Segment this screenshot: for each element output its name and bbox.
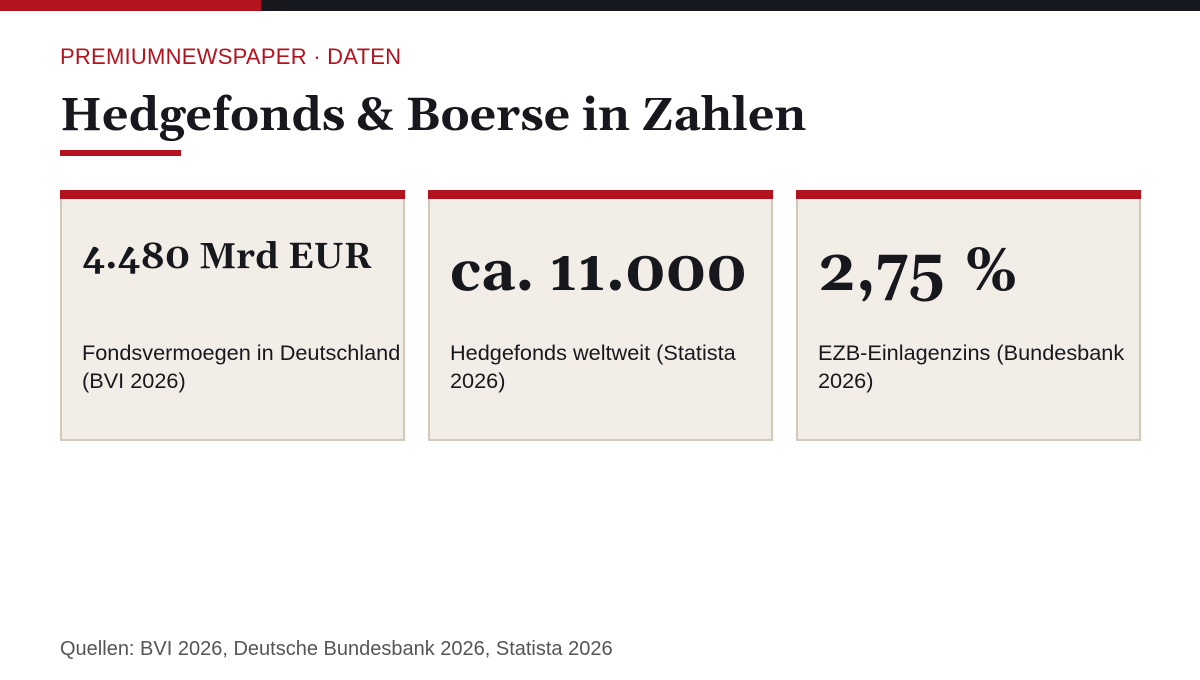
card accent bar xyxy=(796,190,1141,199)
stat value: 4.480 Mrd EUR xyxy=(82,236,373,281)
card accent bar xyxy=(428,190,773,199)
panel: fund assets xyxy=(60,190,405,441)
stat label: 2026) xyxy=(818,368,873,393)
panel: ECB rate xyxy=(796,190,1141,441)
sources: Quellen: BVI 2026, Deutsche Bundesbank 2026, Statista 2026 xyxy=(60,638,613,660)
stat label: 2026) xyxy=(450,368,505,393)
title underline xyxy=(60,150,181,156)
stat value: 2,75 % xyxy=(818,234,1017,311)
stat label: Fondsvermoegen in Deutschland xyxy=(82,340,400,365)
panel: hedge funds xyxy=(428,190,773,441)
stat value: ca. 11.000 xyxy=(450,236,747,310)
eyebrow label: PREMIUMNEWSPAPER · DATEN xyxy=(60,44,401,69)
stat label: Hedgefonds weltweit (Statista xyxy=(450,340,736,365)
stat label xyxy=(82,340,400,393)
stat label: EZB-Einlagenzins (Bundesbank xyxy=(818,340,1124,365)
title: Hedgefonds & Boerse in Zahlen xyxy=(60,87,806,146)
top bar xyxy=(0,0,1200,11)
stat label xyxy=(450,340,736,393)
top bar red accent xyxy=(0,0,261,11)
stat label: (BVI 2026) xyxy=(82,368,186,393)
stat label xyxy=(818,340,1124,393)
card accent bar xyxy=(60,190,405,199)
